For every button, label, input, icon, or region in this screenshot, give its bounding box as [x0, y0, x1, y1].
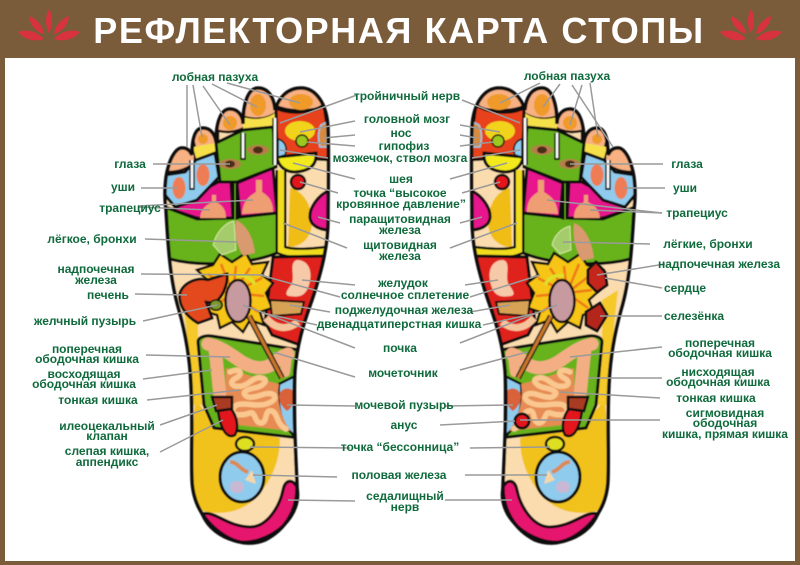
left foot labels: надпочечная	[57, 262, 135, 276]
cerebellum	[278, 139, 286, 157]
sciatic nerve band	[202, 481, 298, 542]
center labels: почка	[383, 341, 417, 355]
stomach organ	[286, 260, 310, 297]
left foot labels: глаза	[114, 157, 146, 171]
right foot labels: тонкая кишка	[676, 391, 756, 405]
right foot labels: сигмовидная	[686, 406, 764, 420]
right foot labels: сердце	[664, 281, 706, 295]
pancreas	[270, 300, 304, 316]
right foot labels	[524, 69, 788, 441]
right foot labels: надпочечная железа	[658, 257, 780, 271]
center labels	[317, 89, 482, 514]
center labels: половая железа	[352, 468, 447, 482]
colon	[208, 344, 288, 395]
center labels: щитовидная	[363, 238, 437, 252]
center labels: гипофиз	[379, 139, 429, 153]
left foot labels: илеоцекальный	[59, 419, 155, 433]
left foot labels: лобная пазуха	[172, 70, 259, 84]
left foot labels: тонкая кишка	[58, 393, 138, 407]
left foot labels: восходящая	[47, 367, 121, 381]
toe gaps	[192, 118, 275, 190]
trapezius torsos	[200, 195, 226, 218]
icon: left lotus	[18, 9, 80, 40]
right foot labels: селезёнка	[664, 309, 724, 323]
toe stems	[193, 143, 216, 158]
ears	[172, 177, 186, 199]
spleen	[586, 303, 607, 331]
stomach zone	[265, 256, 325, 345]
center labels: поджелудочная железа	[335, 303, 474, 317]
green lung zone	[160, 180, 277, 264]
center labels: анус	[391, 418, 418, 432]
left pale lung	[213, 221, 236, 255]
thyroid strip	[281, 170, 328, 253]
pink zones	[173, 182, 233, 218]
icon: right lotus	[720, 9, 782, 40]
left foot labels: лёгкое, бронхи	[47, 232, 137, 246]
blue ear zone	[165, 153, 219, 207]
kidney cap	[236, 275, 255, 285]
anus point	[515, 414, 529, 428]
center labels: точка “высокое	[353, 186, 447, 200]
left foot labels: ободочная кишка	[35, 352, 139, 366]
left dark lung	[235, 220, 255, 256]
left foot labels: ободочная кишка	[32, 377, 136, 391]
liver	[180, 274, 227, 323]
duodenum	[266, 318, 298, 328]
title: РЕФЛЕКТОРНАЯ КАРТА СТОПЫ	[93, 10, 705, 51]
parathyroid	[310, 190, 330, 230]
center labels: мочеточник	[368, 366, 439, 380]
foot outline	[165, 88, 328, 543]
star rays	[208, 264, 264, 312]
gonad zone	[220, 452, 264, 502]
pituitary	[296, 135, 308, 147]
center labels: точка “бессонница”	[341, 440, 459, 454]
right foot labels: глаза	[671, 157, 703, 171]
right dark lung	[573, 223, 594, 261]
insomnia point	[236, 437, 254, 451]
center labels: мочевой пузырь	[354, 398, 454, 412]
center labels: головной мозг	[364, 112, 450, 126]
left foot labels: трапециус	[99, 201, 161, 215]
heart	[588, 262, 607, 292]
leader lines	[135, 83, 665, 501]
eyes	[219, 145, 269, 169]
green toe zone	[216, 127, 276, 182]
left foot labels: железа	[74, 273, 117, 287]
right foot labels: ободочная кишка	[666, 375, 770, 389]
right foot labels: ободочная	[693, 416, 757, 430]
toe caps	[160, 140, 195, 172]
nose zone	[319, 122, 327, 147]
neck band	[277, 153, 316, 172]
center labels: нос	[390, 126, 412, 140]
left foot labels: желчный пузырь	[33, 314, 136, 328]
center labels: тройничный нерв	[354, 89, 460, 103]
left foot labels: слепая кишка,	[65, 444, 149, 458]
right foot labels: трапециус	[666, 206, 728, 220]
left foot map	[160, 85, 332, 543]
right pale lung	[552, 226, 571, 254]
left foot labels: печень	[87, 288, 129, 302]
yellow heel shading	[190, 400, 280, 513]
high pressure point	[291, 175, 305, 189]
right foot labels: нисходящая	[681, 365, 755, 379]
left foot labels: поперечная	[52, 342, 122, 356]
gonad organs	[230, 462, 256, 493]
solar plexus star	[197, 253, 273, 332]
center labels: железа	[378, 249, 421, 263]
intestine zone	[198, 336, 300, 438]
small intestine	[226, 368, 291, 431]
center labels: двенадцатиперстная кишка	[317, 317, 482, 331]
center labels: паращитовидная	[349, 212, 451, 226]
right foot organs	[515, 223, 607, 428]
big toe red zone	[276, 105, 332, 160]
bladder zone	[278, 376, 295, 437]
bladder organ	[279, 389, 295, 411]
right foot labels: лобная пазуха	[524, 69, 611, 83]
center labels: солнечное сплетение	[341, 288, 469, 302]
center labels: нерв	[391, 500, 419, 514]
ureter	[249, 316, 282, 378]
left foot liver	[180, 220, 255, 323]
foot base	[165, 88, 328, 543]
left foot labels: клапан	[86, 429, 128, 443]
center labels: желудок	[377, 276, 429, 290]
center labels: седалищный	[366, 489, 444, 503]
left foot labels: уши	[111, 180, 135, 194]
right foot labels: лёгкие, бронхи	[663, 237, 753, 251]
left foot labels	[32, 70, 259, 469]
center labels: кровянное давление”	[336, 197, 466, 211]
appendix	[218, 409, 237, 436]
left foot labels: аппендикс	[76, 455, 139, 469]
yellow column	[288, 188, 312, 247]
gallbladder	[210, 300, 222, 310]
brain	[285, 121, 315, 141]
right foot labels: поперечная	[685, 336, 755, 350]
right foot labels: ободочная кишка	[668, 346, 772, 360]
right foot labels: кишка, прямая кишка	[662, 427, 788, 441]
center labels: мозжечок, ствол мозга	[333, 151, 468, 165]
right foot map	[468, 85, 640, 543]
ileocecal valve	[212, 397, 232, 411]
small intestine loops	[230, 370, 286, 429]
center labels: железа	[378, 223, 421, 237]
right foot labels: уши	[673, 181, 697, 195]
kidney	[226, 280, 250, 322]
center labels: шея	[389, 172, 413, 186]
